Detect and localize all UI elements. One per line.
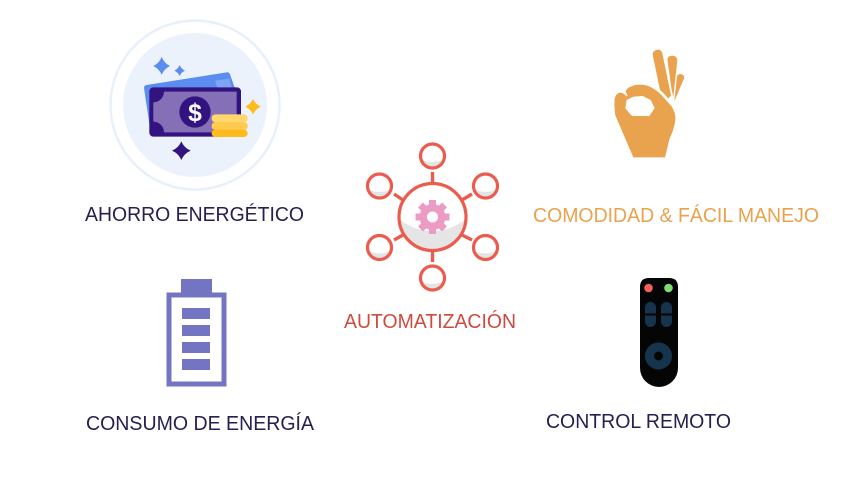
icon: money with coins xyxy=(110,20,280,190)
heading: consumo de energía: CONSUMO DE ENERGÍA xyxy=(86,412,315,435)
heading: automatización: AUTOMATIZACIÓN xyxy=(344,310,516,333)
icon: battery xyxy=(169,279,224,384)
icon: automation network xyxy=(368,144,498,290)
heading: ahorro energético: AHORRO ENERGÉTICO xyxy=(85,203,304,226)
heading: control remoto: CONTROL REMOTO xyxy=(546,411,731,433)
icon: remote control xyxy=(640,278,678,387)
icon: ok hand xyxy=(614,50,684,157)
icon: money with coins: $ xyxy=(188,100,202,127)
heading: comodidad y fácil manejo: COMODIDAD & FÁCIL MANEJO xyxy=(533,204,819,227)
